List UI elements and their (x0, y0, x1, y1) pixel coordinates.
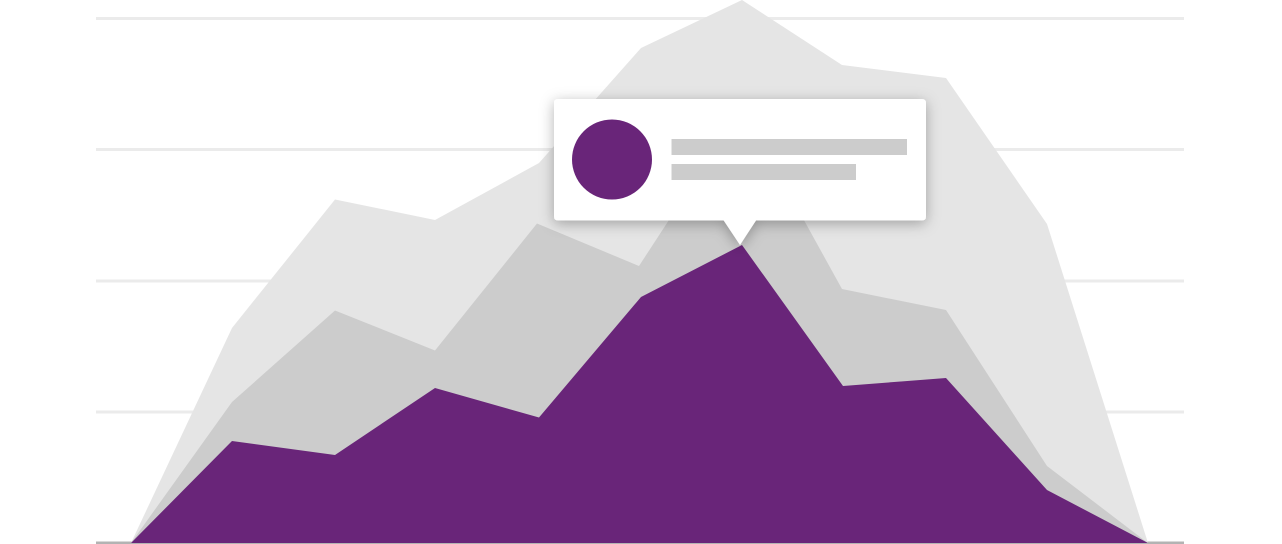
tooltip card with pointer (554, 99, 926, 245)
tooltip avatar circle (572, 120, 652, 200)
tooltip text placeholder line 1 (672, 139, 907, 155)
middle area series (mid grey) (131, 108, 1148, 543)
tooltip text placeholder line 2 (672, 164, 856, 180)
front area series (purple) (131, 245, 1148, 543)
x axis baseline (96, 542, 1184, 544)
tooltip callout (554, 99, 926, 245)
back area series (light grey) (131, 0, 1148, 543)
chart grid lines (96, 17, 1184, 414)
